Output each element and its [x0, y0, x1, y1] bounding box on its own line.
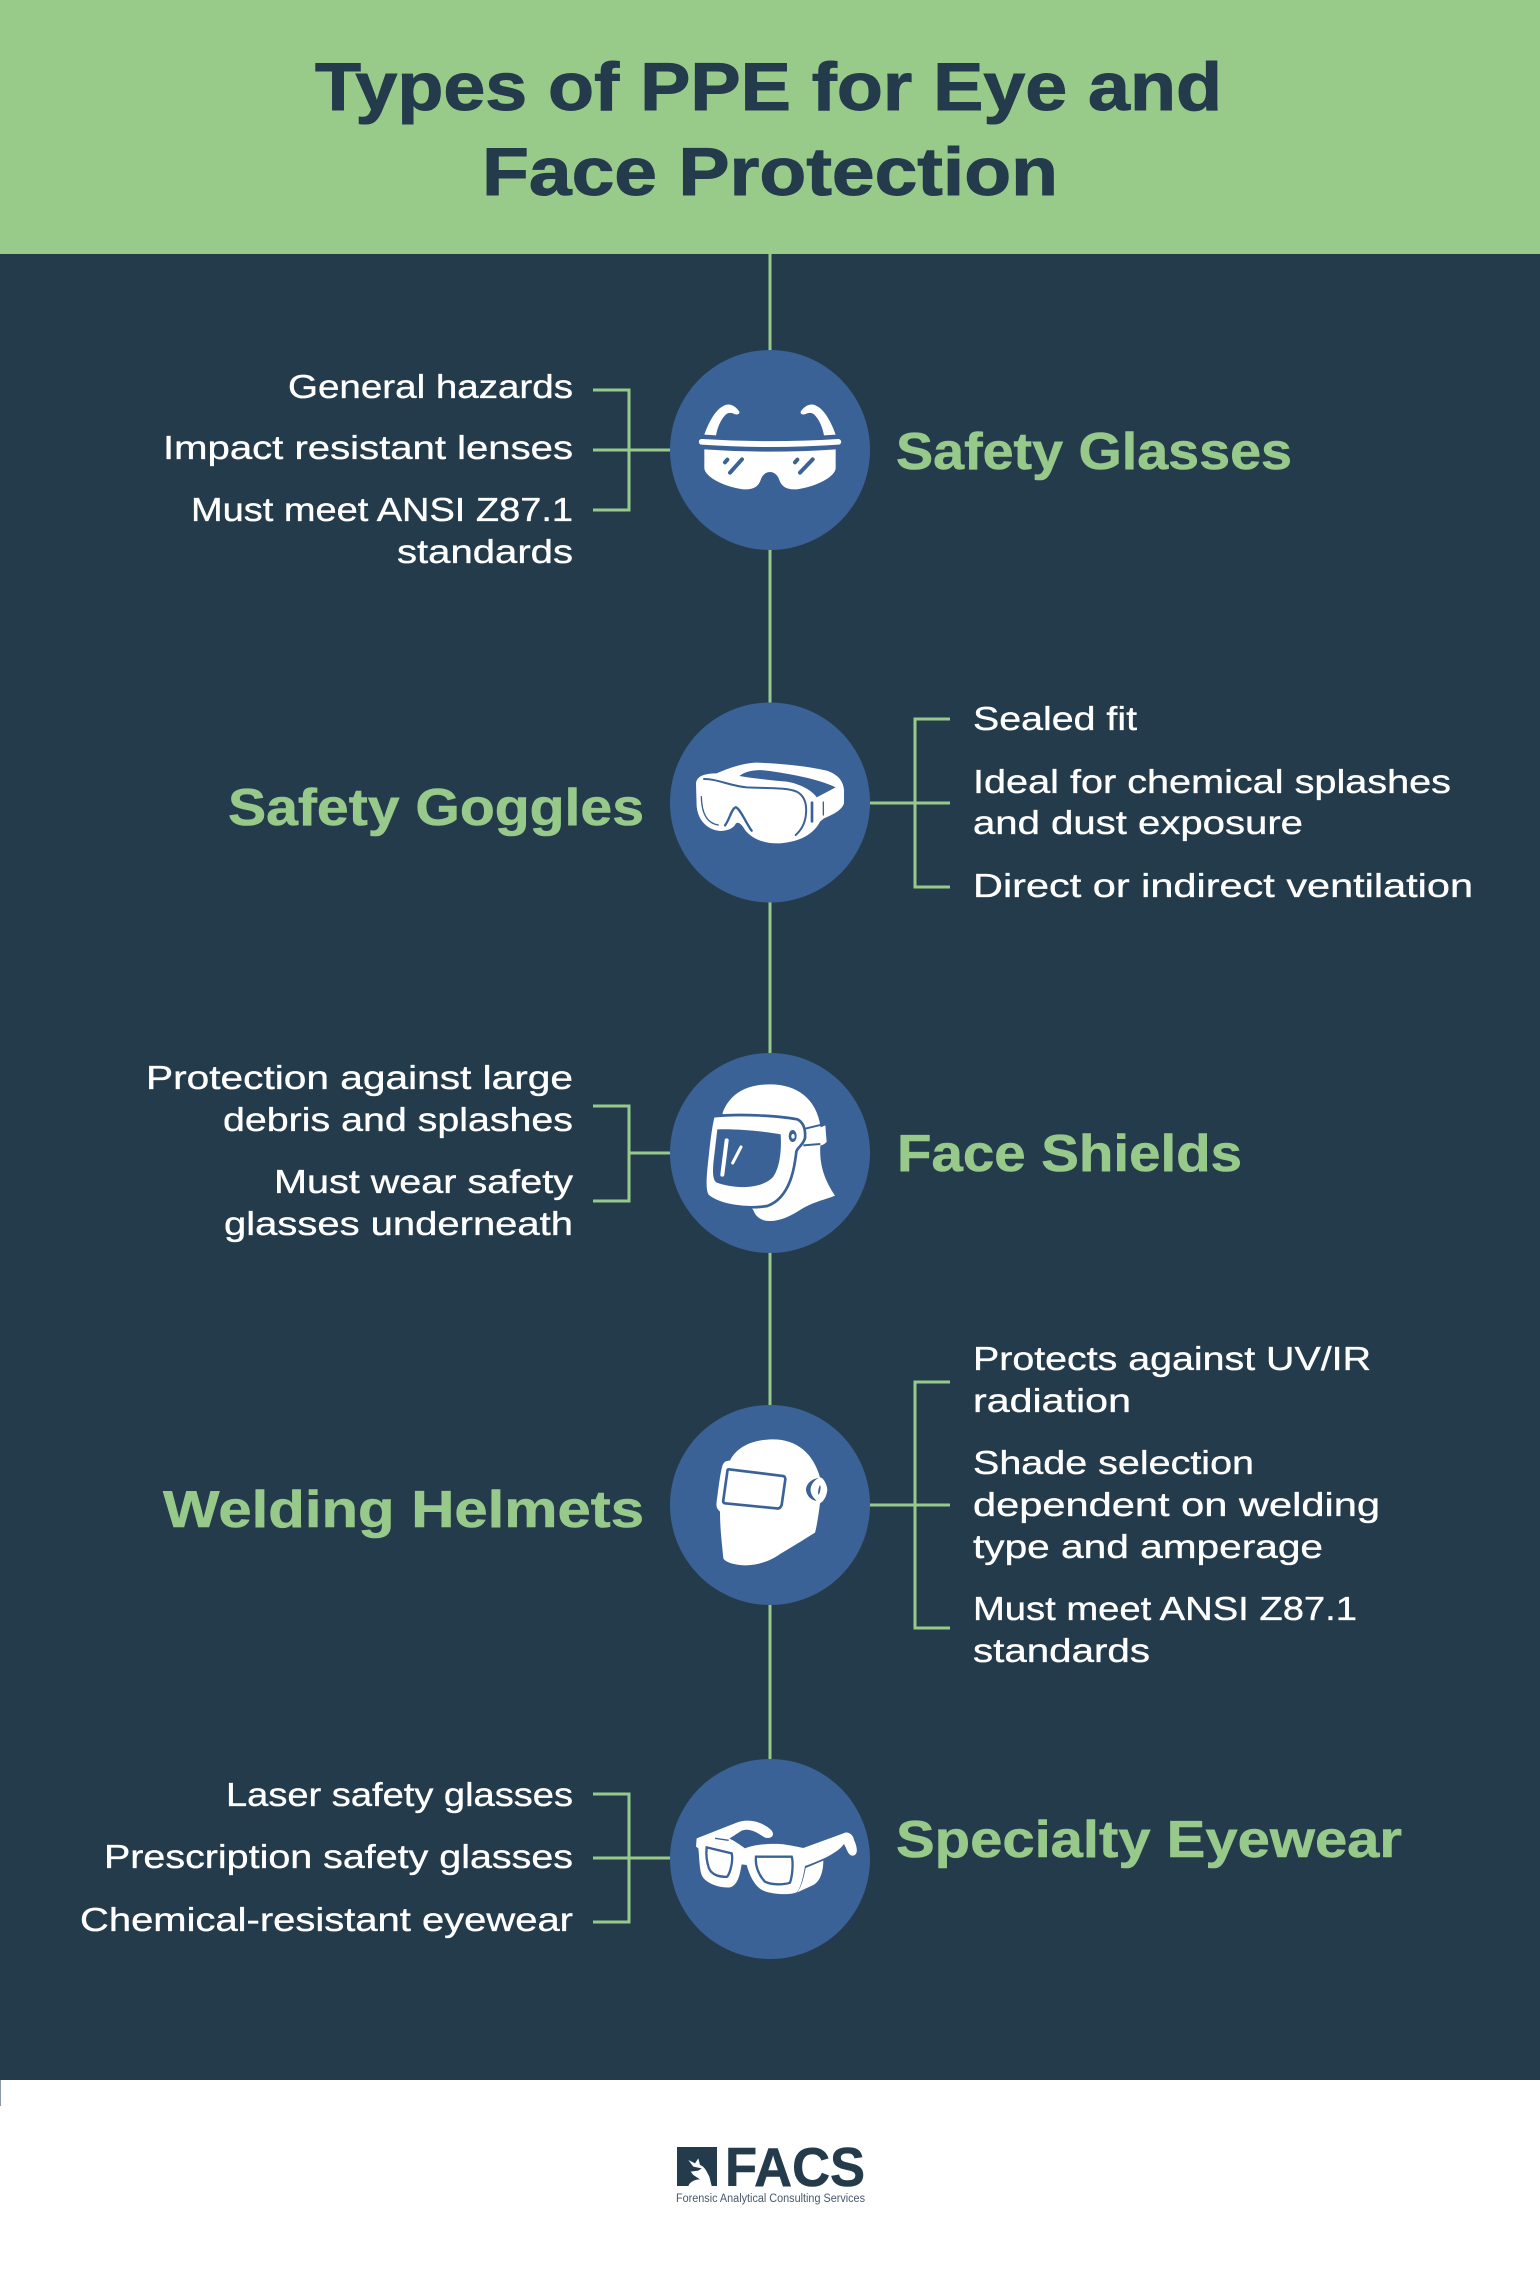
bracket connector [870, 719, 950, 887]
panel: safety goggles [228, 700, 1473, 904]
bracket connector [593, 1106, 670, 1201]
text block: specialty eyewear points: Laser safety glasses [226, 1776, 573, 1813]
logo tagline: Forensic Analytical Consulting Services [676, 2193, 865, 2205]
text block: welding helmets points: standards [973, 1632, 1150, 1669]
bracket connector [870, 1382, 950, 1628]
heading: safety glasses: Safety Glasses [896, 423, 1292, 481]
text block: safety goggles points: and dust exposure [973, 804, 1303, 841]
text block: face shields points: glasses underneath [224, 1205, 573, 1242]
panel: welding helmets [163, 1340, 1380, 1669]
logo mark [677, 2147, 717, 2186]
text block: welding helmets points: Must meet ANSI Z87.1 [973, 1590, 1357, 1627]
central timeline line [768, 254, 772, 1814]
bracket connector [593, 1794, 670, 1922]
logo: FACS [676, 2136, 865, 2205]
heading: face shields: Face Shields [897, 1125, 1242, 1183]
icon: safety goggles [670, 702, 870, 902]
text block: face shields points: Must wear safety [274, 1163, 574, 1200]
text block: specialty eyewear points: Prescription safety glasses [104, 1838, 573, 1875]
heading: welding helmets: Welding Helmets [163, 1481, 644, 1539]
icon: face shield [670, 1053, 870, 1253]
text block: specialty eyewear points [80, 1776, 573, 1938]
text block: welding helmets points: type and amperage [973, 1528, 1323, 1565]
panel: face shields [146, 1053, 1242, 1253]
text block: safety glasses points: Impact resistant lenses [163, 429, 573, 466]
text block: safety goggles points [973, 700, 1473, 904]
text block: face shields points [146, 1059, 574, 1242]
text block: welding helmets points: Protects against UV/IR [973, 1340, 1371, 1377]
heading: specialty eyewear: Specialty Eyewear [896, 1811, 1402, 1869]
heading: safety goggles: Safety Goggles [228, 779, 644, 837]
text block: welding helmets points: Shade selection [973, 1444, 1254, 1481]
text block: safety glasses points [163, 368, 573, 570]
text block: welding helmets points [973, 1340, 1380, 1669]
text block: welding helmets points: dependent on welding [973, 1486, 1380, 1523]
header banner [0, 0, 1540, 254]
title: Face Protection [482, 134, 1058, 210]
text block: safety glasses points: General hazards [288, 368, 573, 405]
text block: specialty eyewear points: Chemical-resistant eyewear [80, 1901, 573, 1938]
icon: safety glasses [670, 350, 870, 550]
title [315, 49, 1222, 210]
panel: specialty eyewear [80, 1759, 1402, 1959]
text block: face shields points: debris and splashes [223, 1101, 573, 1138]
panel: safety glasses [163, 350, 1292, 570]
title: Types of PPE for Eye and [315, 49, 1222, 125]
icon: specialty eyewear [670, 1759, 870, 1959]
text block: safety goggles points: Direct or indirect ventilation [973, 867, 1473, 904]
text block: face shields points: Protection against large [146, 1059, 573, 1096]
text block: safety glasses points: standards [397, 533, 573, 570]
icon: welding helmet [670, 1405, 870, 1605]
text block: safety goggles points: Sealed fit [973, 700, 1137, 737]
logo wordmark: FACS [725, 2136, 865, 2198]
text block: safety goggles points: Ideal for chemical splashes [973, 763, 1451, 800]
text block: welding helmets points: radiation [973, 1382, 1131, 1419]
text block: safety glasses points: Must meet ANSI Z87.1 [191, 491, 573, 528]
bracket connector [593, 390, 670, 510]
